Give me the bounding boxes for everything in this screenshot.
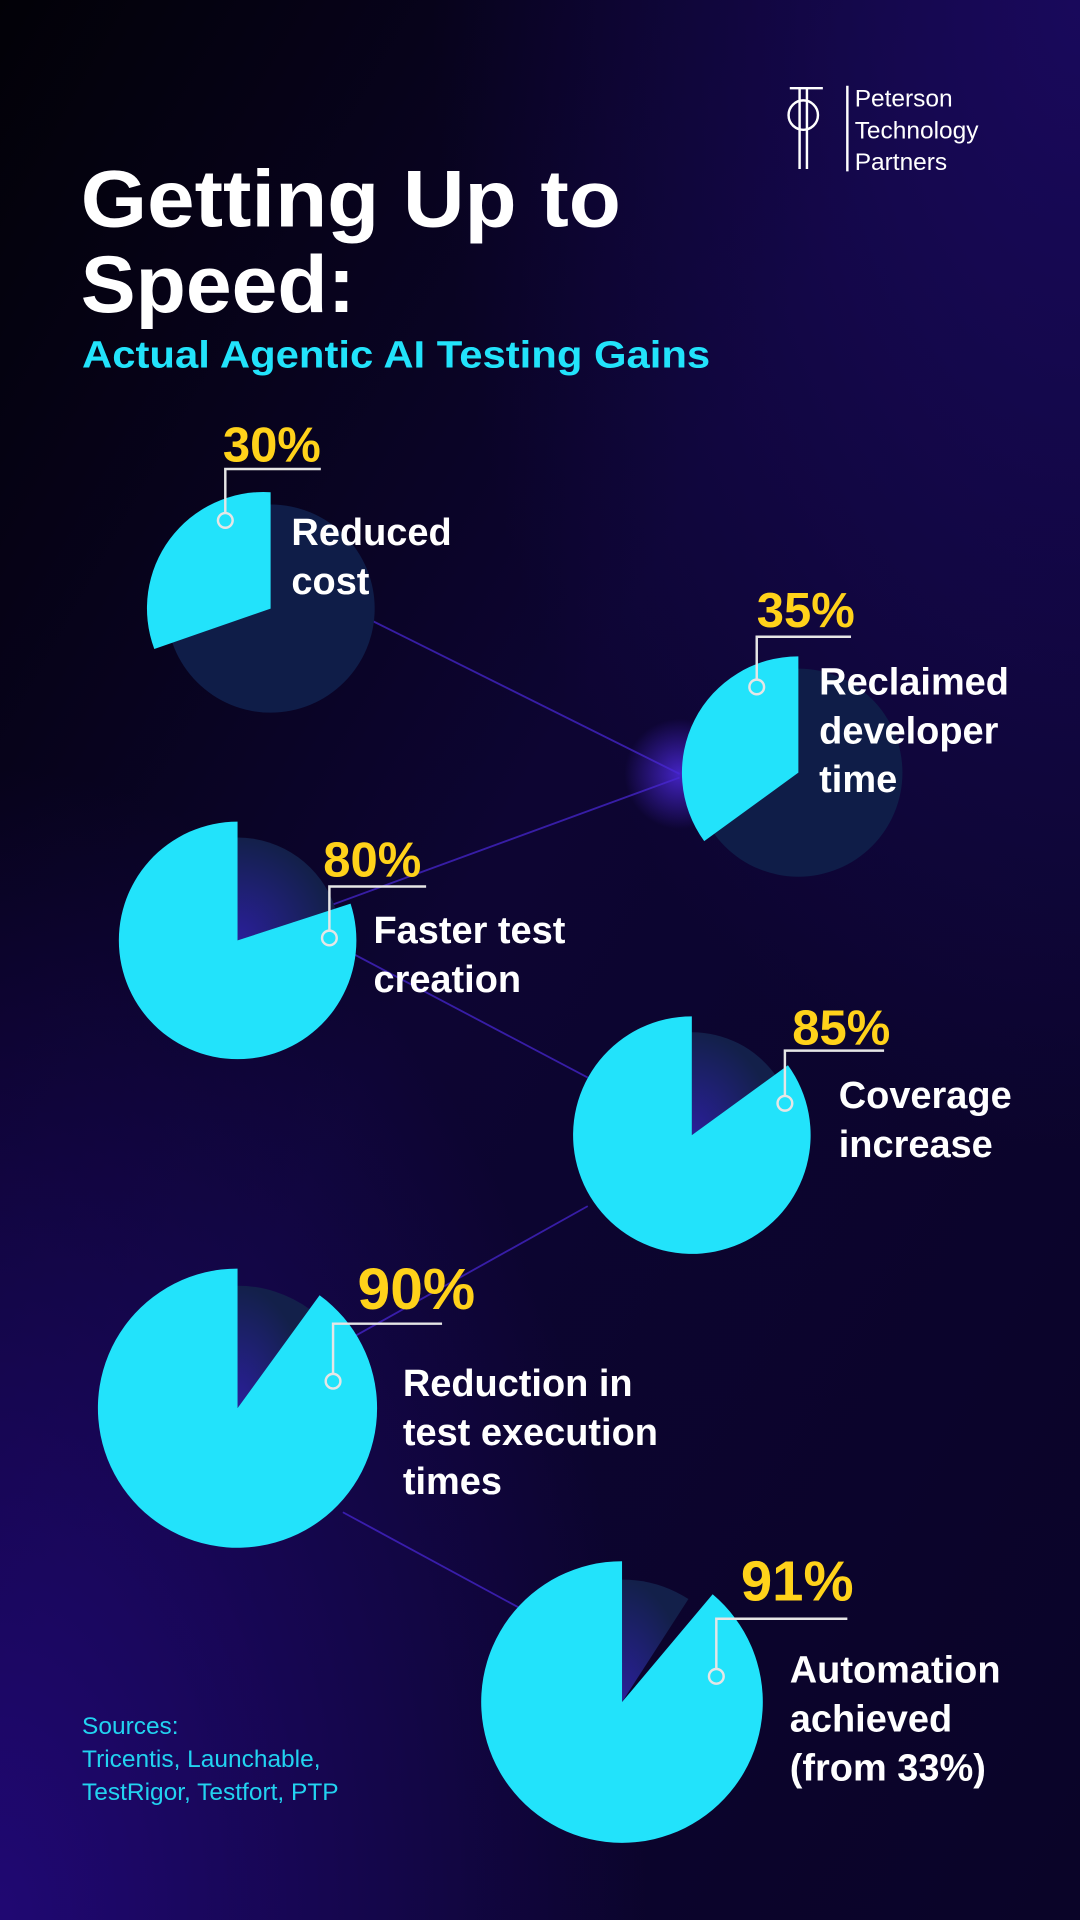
title [81,155,621,330]
title: Getting Up to [81,155,621,245]
pie: 85% coverage increase: Coverage [839,1075,1012,1117]
pie: 91% automation achieved: 91% [741,1549,854,1612]
pie: 35% reclaimed developer time: time [819,759,897,801]
pie: 30% reduced cost: 30% [223,419,321,473]
logo [789,86,979,176]
logo: Partners [855,149,947,176]
pie: 85% coverage increase [573,1001,1012,1254]
pie: 30% reduced cost: Reduced [291,512,452,554]
logo: Peterson [855,86,953,113]
pie: 90% reduction in test execution times: times [403,1461,502,1503]
pie: 30% reduced cost [147,419,452,713]
title: Speed: [81,240,355,330]
pie: 90% reduction in test execution times [98,1257,658,1548]
sources: TestRigor, Testfort, PTP [82,1779,339,1806]
pie: 85% coverage increase: increase [839,1124,993,1166]
pie: 91% automation achieved [481,1549,1001,1843]
pie: 90% reduction in test execution times: test execution [403,1412,658,1454]
subtitle: Actual Agentic AI Testing Gains [82,334,710,376]
pie: 80% faster test creation: creation [373,959,521,1001]
pie: 80% faster test creation [119,822,566,1059]
pie: 90% reduction in test execution times: Reduction in [403,1363,633,1405]
pie: 35% reclaimed developer time [682,584,1009,877]
logo: Technology [855,117,979,144]
pie: 80% faster test creation: Faster test [373,910,566,952]
pie: 91% automation achieved: achieved [790,1698,952,1740]
sources: Sources: [82,1713,179,1740]
pie: 85% coverage increase: 85% [792,1001,890,1055]
pie: 35% reclaimed developer time: developer [819,710,999,752]
pie: 80% faster test creation: 80% [323,834,421,888]
pie: 91% automation achieved: Automation [790,1649,1001,1691]
pie: 30% reduced cost: cost [291,561,370,603]
pie: 35% reclaimed developer time: Reclaimed [819,661,1009,703]
pie: 91% automation achieved: (from 33%) [790,1747,986,1789]
pie: 35% reclaimed developer time: 35% [757,584,855,638]
sources: Tricentis, Launchable, [82,1746,321,1773]
pie: 90% reduction in test execution times: 90% [358,1257,475,1322]
